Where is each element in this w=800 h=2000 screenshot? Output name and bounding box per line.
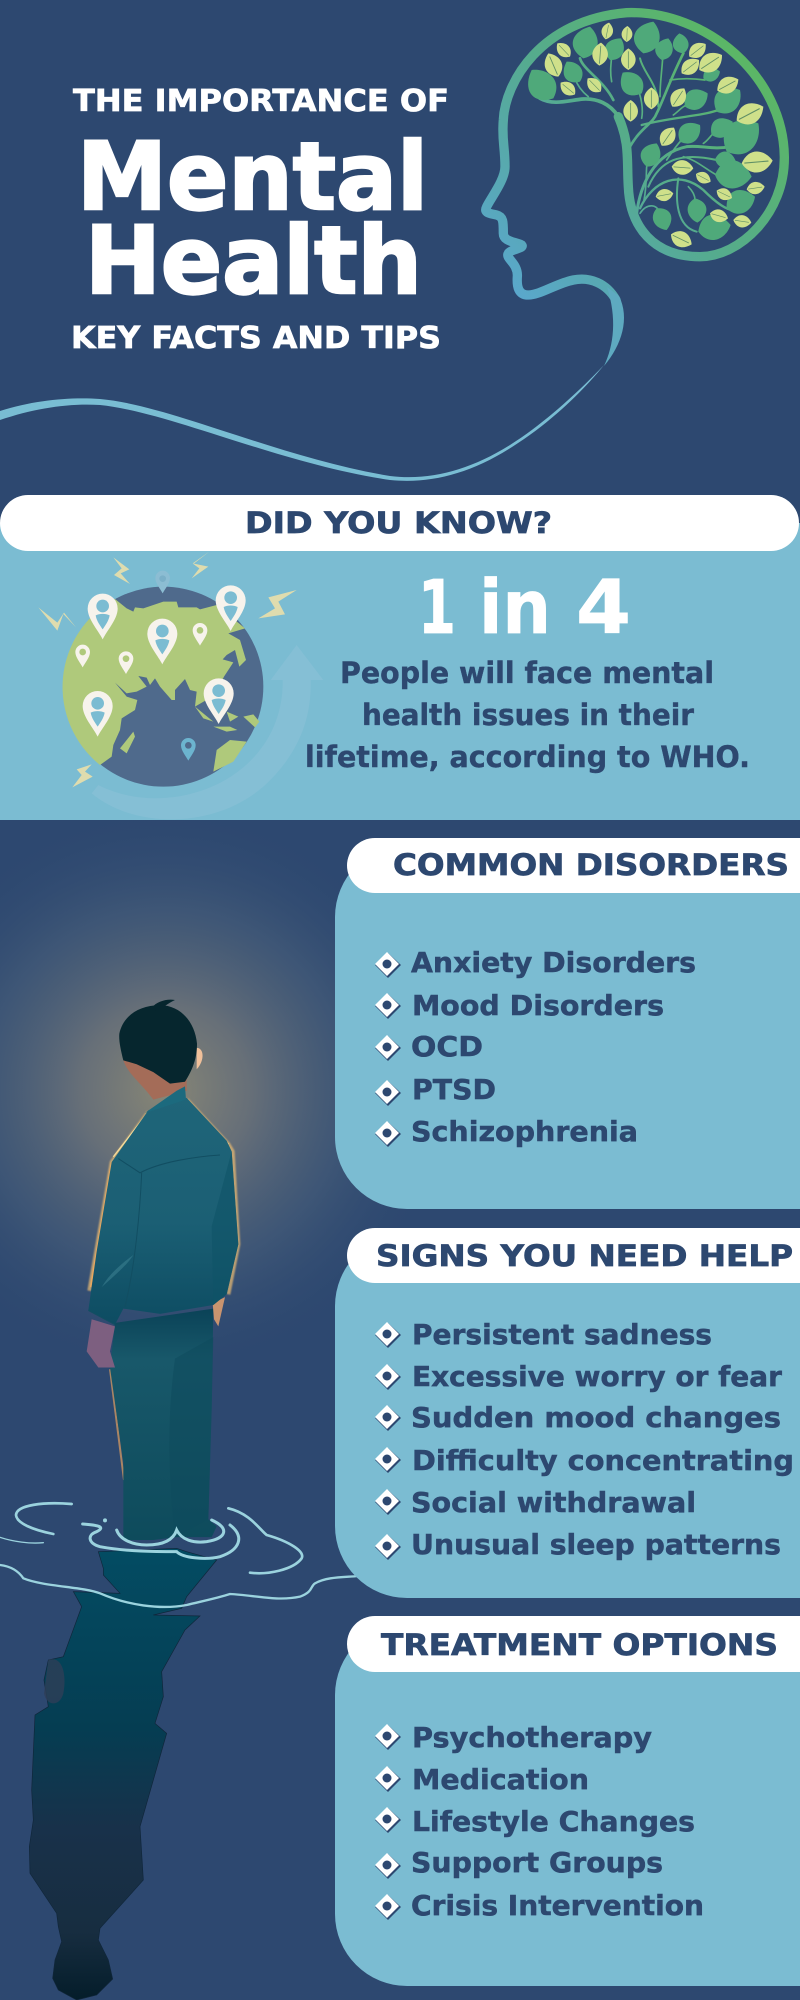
panel: did you know — [0, 495, 800, 820]
title: the importance of: THE IMPORTANCE OF — [73, 84, 449, 119]
rim light — [89, 1100, 238, 1480]
list: disorders: OCD — [411, 1030, 483, 1063]
right hand — [213, 1297, 225, 1326]
list: treatments: Crisis Intervention — [411, 1889, 704, 1922]
glow behind figure — [0, 820, 450, 1380]
stat description: lifetime, according to WHO. — [305, 740, 750, 774]
stat description: health issues in their — [362, 698, 695, 732]
list: signs: Persistent sadness — [412, 1318, 712, 1351]
hair — [119, 1005, 197, 1084]
heading pill: did you know — [0, 495, 799, 551]
wave line from neck — [0, 287, 624, 481]
panel: treatment options — [335, 1616, 800, 1986]
list: signs: Excessive worry or fear — [412, 1360, 782, 1393]
panel: signs you need help — [335, 1228, 800, 1598]
heading pill: did you know: DID YOU KNOW? — [245, 506, 552, 540]
standing figure — [87, 1000, 238, 1540]
list: disorders — [375, 946, 696, 1148]
list: signs: Social withdrawal — [411, 1486, 696, 1519]
list: signs: Sudden mood changes — [411, 1401, 781, 1434]
stat description — [305, 656, 750, 774]
list: signs: Unusual sleep patterns — [411, 1528, 781, 1561]
stat: 1 in 4 — [418, 565, 631, 651]
title: mental: Mental — [77, 123, 428, 232]
heading pill: common disorders: COMMON DISORDERS — [393, 848, 789, 882]
reflection of person — [29, 1548, 217, 2000]
list: disorders: Schizophrenia — [411, 1115, 638, 1148]
curved arrow — [92, 645, 323, 819]
illustration: person standing in water — [0, 1000, 358, 2000]
stat: 1 in 4: 1 — [418, 565, 456, 651]
list: signs: Difficulty concentrating — [412, 1444, 794, 1477]
water ripples — [0, 1503, 358, 1607]
list: signs — [375, 1318, 794, 1561]
panel: common disorders — [335, 838, 800, 1209]
list: disorders: Anxiety Disorders — [411, 946, 696, 979]
stat: 1 in 4: in — [479, 565, 551, 651]
heading pill: treatment options — [347, 1616, 800, 1672]
stat: 1 in 4: 4 — [576, 565, 631, 651]
subtitle: key facts and tips: KEY FACTS AND TIPS — [71, 321, 441, 356]
title block — [71, 84, 449, 356]
stat description: People will face mental — [340, 656, 714, 690]
collar — [145, 1086, 186, 1113]
heading pill: signs you need help: SIGNS YOU NEED HELP — [376, 1239, 793, 1273]
list: disorders: Mood Disorders — [412, 989, 664, 1022]
list: treatments: Medication — [412, 1763, 589, 1796]
list: treatments: Psychotherapy — [412, 1721, 652, 1754]
list: disorders: PTSD — [412, 1073, 496, 1106]
heading pill: common disorders — [347, 838, 800, 893]
neck and ears — [123, 1057, 187, 1100]
title: health: Health — [85, 207, 422, 316]
heading pill: signs you need help — [347, 1228, 800, 1283]
list: treatments — [375, 1721, 704, 1922]
left hand — [87, 1319, 115, 1367]
list: treatments: Lifestyle Changes — [412, 1805, 695, 1838]
icon: globe with location pins — [38, 552, 323, 819]
heading pill: treatment options: TREATMENT OPTIONS — [381, 1628, 778, 1662]
trousers — [110, 1309, 217, 1540]
jacket — [88, 1098, 238, 1325]
list: treatments: Support Groups — [411, 1846, 663, 1879]
icon: head profile with tree — [486, 13, 784, 300]
